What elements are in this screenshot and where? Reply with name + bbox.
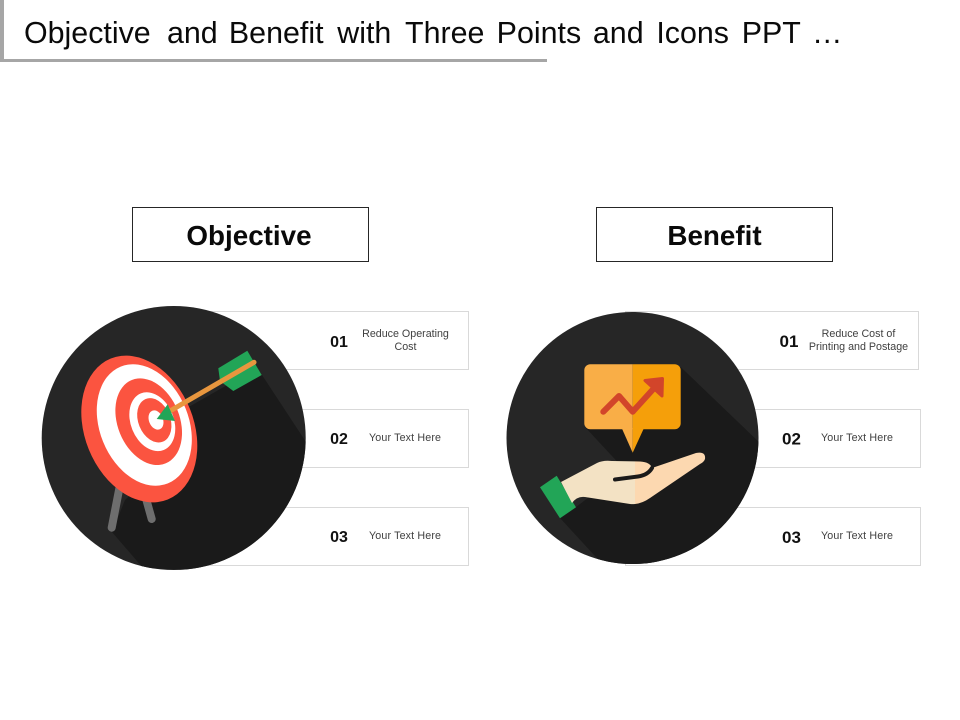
- benefit row 01: [626, 312, 918, 370]
- objective row 01: Cost: [395, 341, 417, 353]
- heading: Objective: [132, 208, 368, 262]
- heading: Objective: Objective: [186, 220, 312, 251]
- benefit row 01: Printing and Postage: [809, 341, 908, 353]
- objective row 02: Your Text Here: [369, 432, 441, 444]
- benefit row 03: 03: [782, 528, 801, 547]
- benefit row 03: [626, 508, 920, 566]
- icon: hand with growth chart: [506, 312, 762, 570]
- objective row 01: [200, 312, 468, 370]
- objective row 01: Reduce Operating: [362, 328, 449, 340]
- icon: target with arrow: [42, 306, 308, 575]
- objective row 03: 03: [330, 529, 348, 546]
- objective row 03: [200, 508, 468, 566]
- benefit row 02: Your Text Here: [821, 432, 893, 444]
- benefit row 02: [626, 410, 920, 468]
- objective row 03: Your Text Here: [369, 530, 441, 542]
- title bar: [0, 0, 842, 62]
- objective row 01: 01: [330, 334, 348, 351]
- benefit row 01: 01: [780, 332, 798, 351]
- benefit row 01: Reduce Cost of: [822, 328, 895, 340]
- benefit row 03: Your Text Here: [821, 530, 893, 542]
- heading: Benefit: Benefit: [667, 220, 762, 251]
- title bar: Objective and Benefit with Three Points and Icons PPT …: [24, 16, 842, 50]
- heading: Benefit: [596, 208, 832, 262]
- benefit row 02: 02: [782, 430, 801, 448]
- objective row 02: 02: [330, 431, 348, 448]
- objective row 02: [200, 410, 468, 468]
